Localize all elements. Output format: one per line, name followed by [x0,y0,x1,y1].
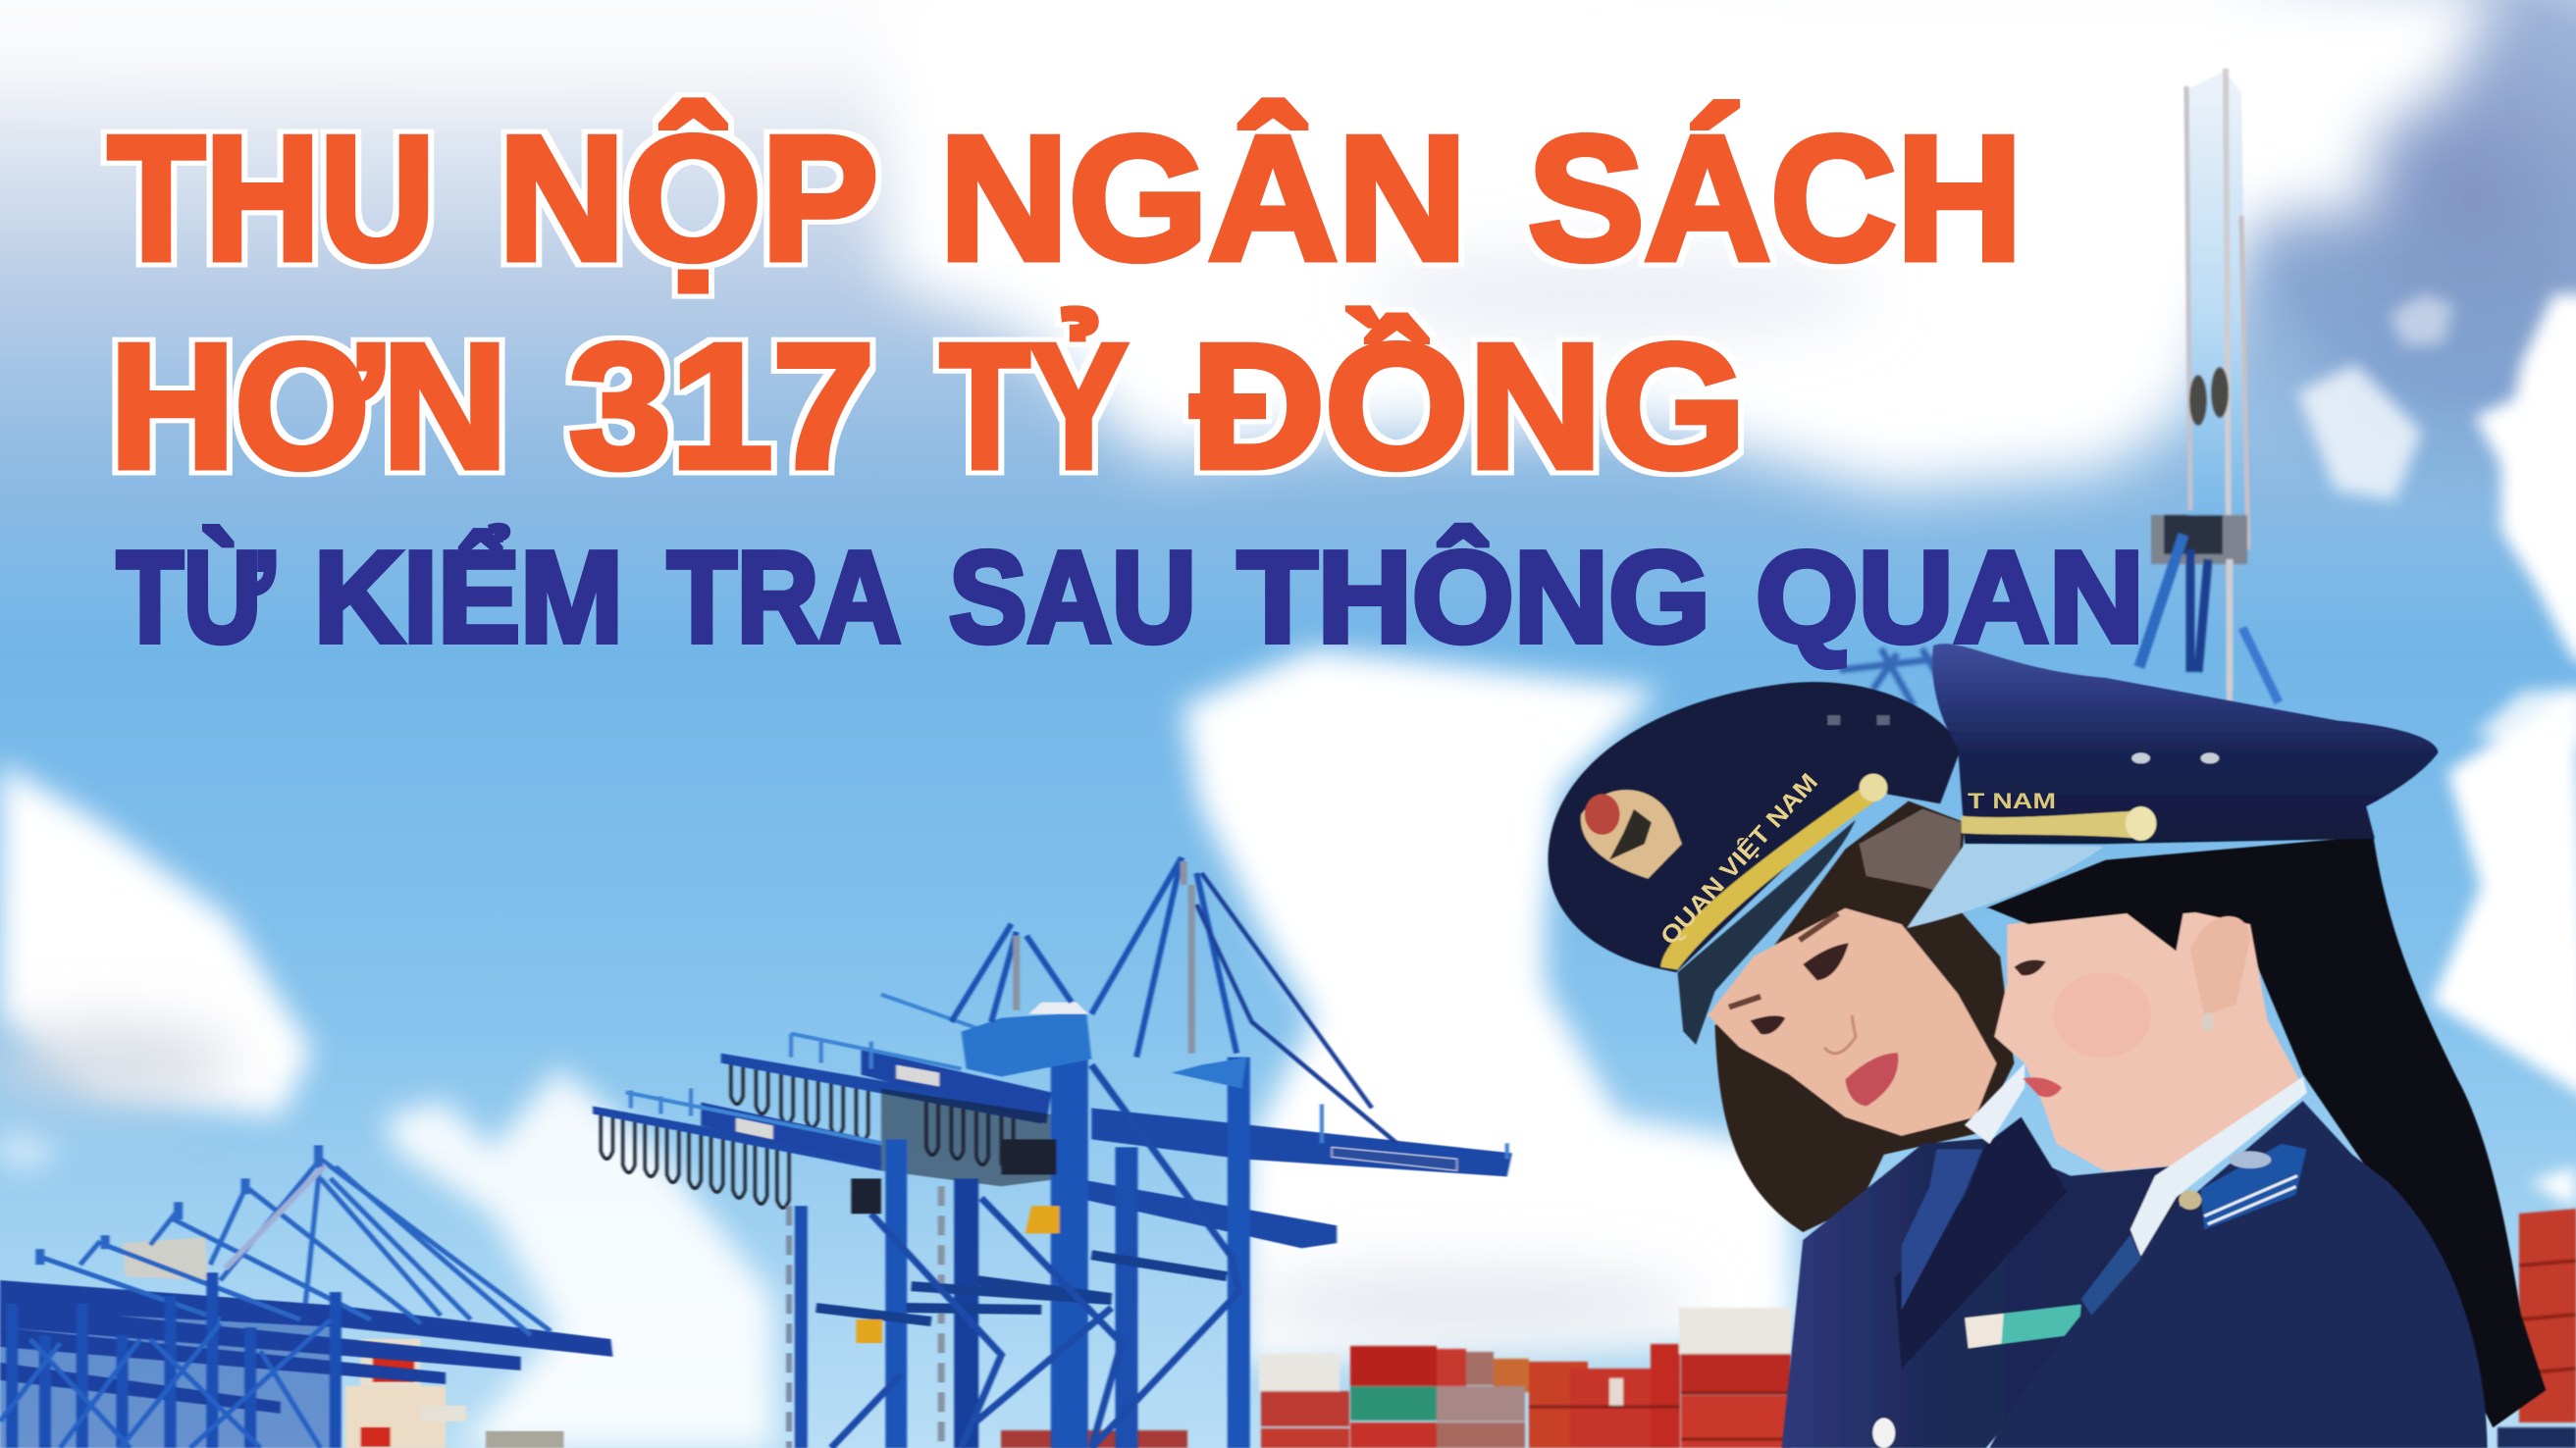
subtitle: KIỂM [314,525,623,669]
subtitle: QUAN [1756,525,2144,669]
left officer hair [1715,802,2014,1232]
left crane body fill [0,1292,341,1448]
left officer visor [1678,820,1856,1045]
cap lettering: right officer: T NAM [1968,789,2056,813]
subtitle: SAU [949,525,1196,669]
yellow spreaders [856,1206,1060,1343]
right officer collar [2130,1077,2307,1257]
officer right [1907,644,2546,1448]
subtitle: TỪ [117,525,274,669]
title line 2: 317 [569,308,874,505]
title line 1: NGÂN [939,100,1467,297]
containers: right stack [2519,1209,2576,1422]
officer left [1548,682,2183,1448]
left officer cap badge [1581,790,1682,879]
crane label panels [736,1065,939,1139]
crane base lattice [2151,515,2247,564]
right officer cap cord [1962,810,2151,839]
left crane housing [122,1237,208,1280]
crane towers and stays [951,857,1236,1058]
right officer bangs [1989,881,2246,951]
customs officers [1548,644,2546,1448]
subtitle: THÔNG [1237,525,1710,669]
title line 1: SÁCH [1528,100,2023,297]
container stacks [1001,1209,2576,1448]
crane mast [2185,71,2249,549]
right officer cheek [2053,972,2151,1059]
left officer lips [1845,1053,1898,1107]
right officer tie [2081,1235,2141,1316]
right officer hair [1986,836,2546,1427]
tall crane, top right [2139,69,2279,702]
left officer eyes [1750,943,1849,1034]
right officer face [1994,908,2299,1171]
title line 1 [108,100,2023,297]
title [108,100,2144,669]
left crane stays [40,1159,551,1335]
title line 2 [110,308,1746,505]
right officer earring [2202,1012,2214,1031]
subtitle: TRA [667,525,901,669]
title line 1: THU [108,100,435,297]
right officer visor [1907,844,2104,928]
right officer cap [1932,644,2438,844]
left crane booms [0,1280,612,1414]
left officer collar [1965,1063,2024,1144]
left officer cap crown [1548,682,1962,972]
crane machine housing [962,1012,1091,1077]
subtitle [117,525,2144,669]
left crane legs [12,1272,336,1448]
right officer eye [2014,959,2046,975]
title line 2: ĐỒNG [1191,308,1746,505]
crane legs [795,1206,808,1448]
cloud shading [0,245,1874,1344]
crane: left group [0,1145,612,1448]
title line 2: HƠN [110,308,507,505]
title line 2: TỶ [940,308,1128,505]
ship superstructure [345,1339,563,1448]
right officer ear [2190,916,2250,1015]
crane hoist cables [601,1058,1014,1208]
crane booms [593,1054,1512,1248]
right officer uniform [1989,1101,2488,1448]
left officer name tag [1965,1305,2081,1348]
left officer lapel [1894,1117,2067,1369]
left officer face [1708,908,1997,1136]
cap lettering: left officer: QUAN VIỆT NAM [1654,767,1823,951]
left officer nose shadow [1824,1015,1856,1054]
left officer uniform [1782,1138,2183,1448]
containers: centre stack [1001,1308,1791,1448]
left officer button [1872,1418,1895,1448]
left officer cap cord [1660,782,1887,969]
crane cross braces [816,1255,1227,1321]
darker sky corner [2139,0,2576,520]
left officer tie [1902,1149,1982,1310]
crane piece behind caps [1840,648,1955,706]
crane trolley clutter [881,1088,1062,1186]
right officer lips [2023,1077,2062,1097]
title line 1: NỘP [499,100,878,297]
crane: foreground large [593,857,1512,1448]
right officer shoulder board [2179,1144,2306,1229]
